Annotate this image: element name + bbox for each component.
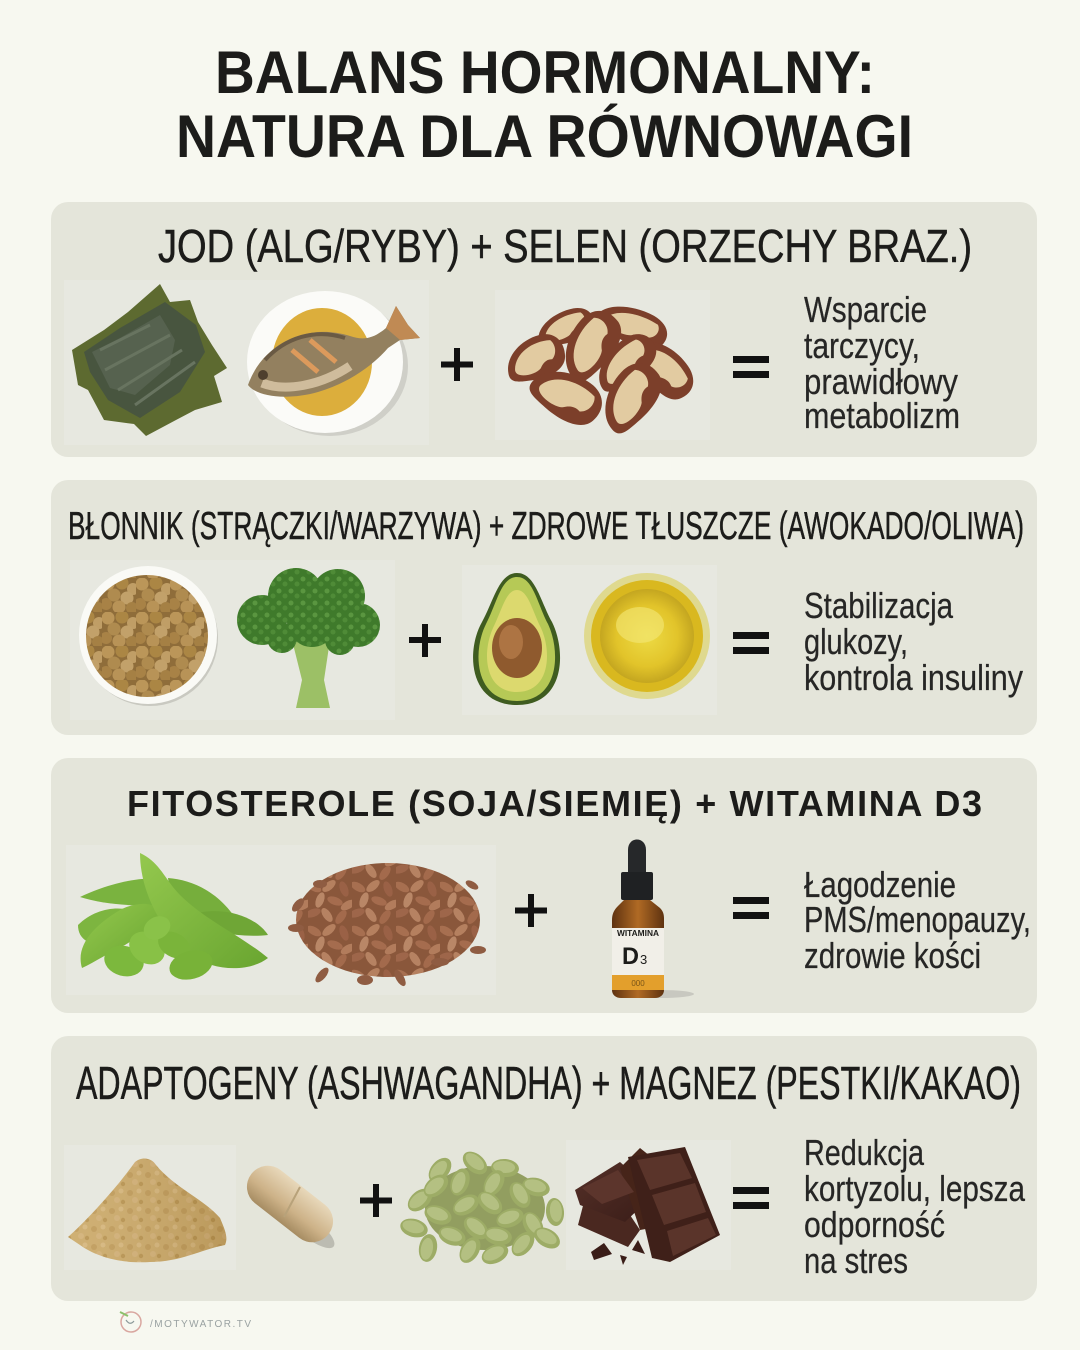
result text: Łagodzenie [804,864,956,905]
icon: vitamin D3 bottle: 3 [640,952,647,967]
equals sign [733,356,769,378]
title: NATURA DLA RÓWNOWAGI [176,103,913,170]
panel: jod i selen [51,202,1037,457]
panel: błonnik i tłuszcze [51,480,1037,735]
result text: odporność [804,1204,945,1245]
icon: pumpkin seeds [398,1147,565,1268]
result text: zdrowie kości [804,935,981,976]
title [176,39,913,170]
equals sign [733,1187,769,1209]
title: BALANS HORMONALNY: [215,39,875,106]
watermark: /MOTYWATOR.TV [150,1319,251,1330]
icon: capsule [238,1157,342,1254]
icon: vitamin D3 bottle: D [622,943,639,970]
icon: edamame pods [78,853,268,984]
result text: glukozy, [804,621,908,662]
result text [804,585,1023,698]
result text [804,1132,1026,1281]
result text: Wsparcie [804,289,927,330]
result text [804,864,1031,976]
equals sign [733,897,769,919]
icon: flax seeds [288,863,486,988]
result text: metabolizm [804,395,960,436]
result text: tarczycy, [804,325,920,366]
icon: vitamin D3 bottle: WITAMINA [617,929,659,938]
plus sign [515,894,547,927]
heading: fitosterole i witamina D3: FITOSTEROLE (SOJA/SIEMIĘ) + WITAMINA D3 [127,783,982,824]
icon: fish on plate [247,291,420,436]
watermark [120,1312,251,1332]
result text: kontrola insuliny [804,657,1023,698]
result text: na stres [804,1240,908,1281]
icon: bowl of olive oil [584,573,710,699]
equals sign [733,632,769,654]
icon: chocolate [575,1147,720,1265]
icon: ashwagandha powder [68,1158,226,1262]
icon: broccoli [237,568,380,708]
icon: brazil nuts [501,294,701,440]
result text: PMS/menopauzy, [804,899,1031,940]
panel: fitosterole i witamina D3 [51,758,1037,1013]
icon: avocado [473,573,560,705]
plus sign [409,624,441,657]
result text [804,289,960,436]
result text: Stabilizacja [804,585,954,626]
panel: adaptogeny i magnez [51,1036,1037,1301]
icon: vitamin D3 bottle: 000 [631,979,645,988]
icon: seaweed [72,284,227,436]
plus sign [360,1184,392,1217]
result text: prawidłowy [804,361,958,402]
result text: Redukcja [804,1132,925,1173]
plus sign [441,348,473,381]
result text: kortyzolu, lepsza [804,1168,1026,1209]
icon: bowl of lentils [79,566,218,706]
icon: vitamin D3 bottle [612,840,694,998]
